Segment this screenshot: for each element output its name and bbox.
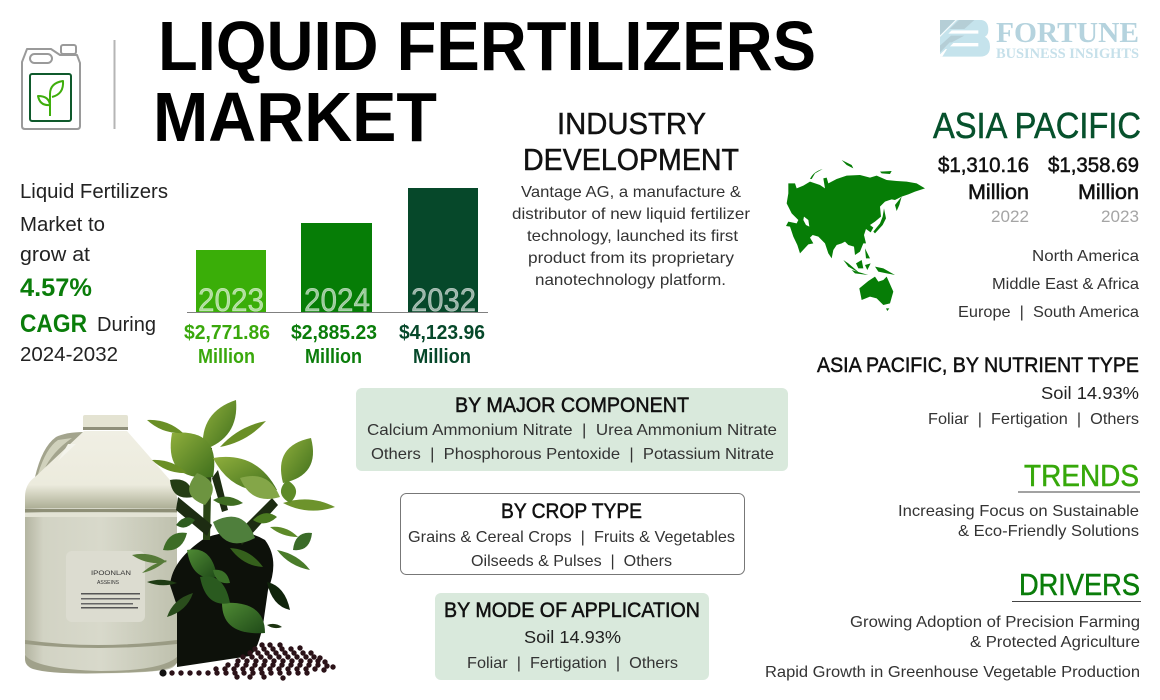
text: industry development body: technology, launched its first: [527, 228, 739, 245]
heading: industry development: [523, 106, 739, 177]
plant leaves: [132, 400, 335, 633]
bar chart: market size: [184, 188, 488, 368]
bar 2024: 2024: [304, 282, 370, 318]
text: industry development body: nanotechnology platform.: [535, 272, 726, 289]
jug label: ASSEINS: [97, 580, 120, 586]
panel: trends: [898, 458, 1140, 540]
panel: by crop type: BY CROP TYPE: [501, 500, 642, 523]
bar 2023: $2,771.86: [184, 322, 270, 344]
bar 2032: [399, 188, 485, 368]
panel: by major component: BY MAJOR COMPONENT: [455, 394, 689, 417]
panel: Asia Pacific by nutrient type: ASIA PACIFIC, BY NUTRIENT TYPE: [817, 354, 1139, 377]
bar 2032: 2032: [411, 282, 476, 318]
logo: Fortune Business Insights: FORTUNE: [996, 17, 1139, 49]
list: other regions: Middle East & Africa: [992, 276, 1139, 293]
bar 2023: Million: [198, 346, 255, 368]
heading: Asia Pacific: ASIA PACIFIC: [933, 105, 1141, 146]
text: CAGR summary: During: [97, 314, 156, 336]
seed pile: [159, 642, 336, 681]
bar 2023: [184, 250, 270, 368]
heading: industry development: INDUSTRY: [557, 106, 706, 141]
text: CAGR summary: grow at: [20, 244, 90, 266]
panel: drivers: Rapid Growth in Greenhouse Vegetable Production: [765, 664, 1140, 681]
divider beside icon: [114, 40, 116, 129]
stat: Asia Pacific 2023: Million: [1078, 181, 1139, 204]
panel: trends: TRENDS: [1024, 458, 1139, 493]
panel: by major component: Calcium Ammonium Nitrate | Urea Ammonium Nitrate: [367, 422, 777, 439]
jug: [25, 415, 177, 673]
title: LIQUID FERTILIZERS: [158, 7, 816, 85]
list: other regions: Europe | South America: [958, 304, 1139, 321]
text: CAGR summary: 4.57%: [20, 274, 92, 302]
panel: drivers: Growing Adoption of Precision Farming: [850, 614, 1140, 631]
map: Asia Pacific: [786, 160, 925, 311]
panel: drivers: [765, 567, 1141, 681]
stat: Asia Pacific 2022: Million: [968, 181, 1029, 204]
panel: trends: Increasing Focus on Sustainable: [898, 503, 1139, 520]
text: CAGR summary: CAGR: [20, 310, 87, 338]
panel: drivers: DRIVERS: [1019, 567, 1140, 602]
illustration: fertilizer jug with plant and seeds: [25, 400, 336, 681]
stat: Asia Pacific 2023: 2023: [1101, 207, 1139, 226]
panel: drivers: & Protected Agriculture: [970, 634, 1140, 651]
bar 2024: [291, 223, 377, 368]
text: industry development body: product from its proprietary: [528, 250, 734, 267]
text: industry development body: Vantage AG, a manufacture &: [521, 184, 741, 201]
stat: Asia Pacific 2022: 2022: [991, 207, 1029, 226]
text: CAGR summary: Liquid Fertilizers: [20, 181, 168, 203]
text: CAGR summary: Market to: [20, 214, 105, 236]
title: MARKET: [153, 78, 437, 156]
text: industry development body: distributor of new liquid fertilizer: [512, 206, 751, 223]
panel: trends: & Eco-Friendly Solutions: [958, 523, 1139, 540]
panel: by major component: Others | Phosphorous Pentoxide | Potassium Nitrate: [371, 446, 774, 463]
list: other regions: North America: [1032, 248, 1139, 265]
bar 2024: $2,885.23: [291, 322, 377, 344]
stat: Asia Pacific 2022: $1,310.16: [938, 154, 1029, 177]
bar 2023: 2023: [198, 282, 264, 318]
jug label: IPOONLAN: [91, 570, 131, 577]
panel: by crop type: Oilseeds & Pulses | Others: [471, 553, 672, 570]
logo: Fortune Business Insights: [940, 17, 1139, 62]
panel: by mode of application: Foliar | Fertigation | Others: [467, 655, 678, 672]
bar 2024: Million: [305, 346, 362, 368]
panel: Asia Pacific by nutrient type: Foliar | Fertigation | Others: [928, 411, 1139, 428]
panel: by mode of application: [435, 593, 709, 680]
panel: Asia Pacific by nutrient type: [817, 354, 1139, 428]
panel: by mode of application: BY MODE OF APPLICATION: [444, 599, 700, 622]
panel: by mode of application: Soil 14.93%: [524, 627, 621, 647]
icon: fertilizer canister: [22, 45, 80, 129]
plant pot and dark foliage: [170, 445, 278, 667]
heading: industry development: DEVELOPMENT: [523, 142, 739, 177]
panel: by crop type: [400, 494, 744, 574]
panel: by crop type: Grains & Cereal Crops | Fruits & Vegetables: [408, 529, 735, 546]
logo: Fortune Business Insights: BUSINESS INSIGHTS: [996, 46, 1139, 62]
jug label: [66, 551, 145, 622]
title: [153, 7, 816, 156]
bar 2032: $4,123.96: [399, 322, 485, 344]
stat: Asia Pacific 2023: [1048, 154, 1139, 226]
text: CAGR summary: [20, 181, 168, 366]
bar 2032: Million: [413, 346, 471, 368]
list: other regions: [958, 248, 1139, 321]
stat: Asia Pacific 2023: $1,358.69: [1048, 154, 1139, 177]
panel: by major component: [356, 388, 788, 471]
stat: Asia Pacific 2022: [938, 154, 1029, 226]
text: industry development body: [512, 184, 751, 289]
panel: Asia Pacific by nutrient type: Soil 14.93%: [1041, 383, 1139, 403]
text: CAGR summary: 2024-2032: [20, 344, 118, 366]
